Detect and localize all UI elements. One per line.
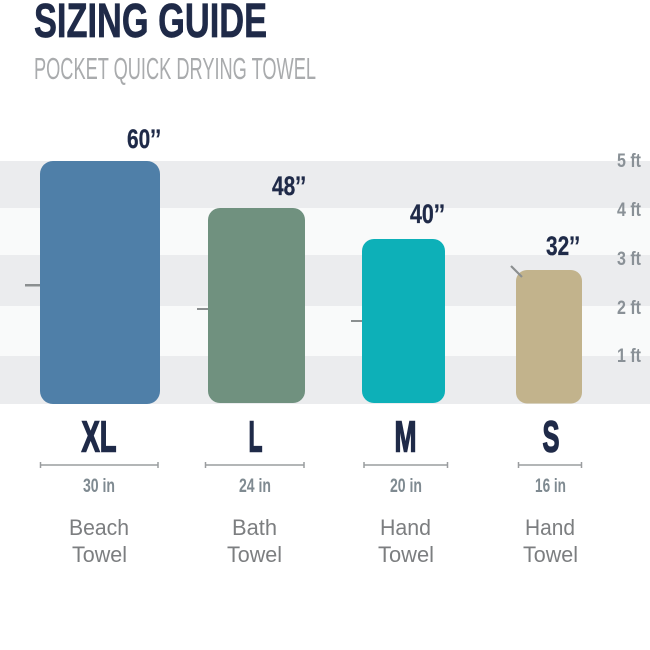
XL width ruler bbox=[40, 462, 158, 468]
column: M hand towel bbox=[351, 199, 448, 567]
L height label: 48’’ bbox=[272, 171, 306, 201]
M width ruler bbox=[364, 462, 448, 468]
XL hanging loop bbox=[25, 284, 41, 286]
S width label: 16 in bbox=[535, 476, 566, 497]
height scale labels: 2 ft bbox=[617, 298, 642, 319]
height scale labels: 5 ft bbox=[617, 151, 642, 172]
L towel name: Towel bbox=[227, 542, 282, 567]
M height label: 40’’ bbox=[410, 199, 445, 229]
XL towel name: Towel bbox=[72, 542, 127, 567]
XL towel name bbox=[69, 515, 129, 567]
S hanging loop bbox=[511, 266, 522, 277]
M towel name: Towel bbox=[378, 542, 434, 567]
height scale labels: 4 ft bbox=[617, 200, 642, 221]
M size letter: M bbox=[394, 412, 416, 462]
M towel name bbox=[378, 515, 434, 567]
L size letter: L bbox=[248, 412, 262, 462]
L width ruler bbox=[206, 462, 304, 468]
L towel name: Bath bbox=[232, 515, 277, 540]
S towel bbox=[516, 270, 582, 404]
S towel name: Towel bbox=[523, 542, 578, 567]
column: L bath towel bbox=[197, 171, 306, 567]
L width label: 24 in bbox=[239, 476, 271, 497]
column: XL beach towel bbox=[25, 124, 161, 567]
XL height label: 60’’ bbox=[127, 124, 161, 154]
S size letter: S bbox=[542, 412, 560, 462]
height scale labels: 1 ft bbox=[617, 346, 642, 367]
background height bands bbox=[0, 161, 650, 404]
M width label: 20 in bbox=[390, 476, 422, 497]
XL width label: 30 in bbox=[83, 476, 115, 497]
S towel name: Hand bbox=[525, 515, 575, 540]
subtitle: POCKET QUICK DRYING TOWEL bbox=[34, 51, 316, 86]
XL towel bbox=[40, 161, 160, 404]
L hanging loop bbox=[197, 308, 209, 310]
M towel name: Hand bbox=[380, 515, 431, 540]
M towel bbox=[362, 239, 445, 403]
M hanging loop bbox=[351, 320, 363, 322]
S height label: 32’’ bbox=[546, 231, 580, 261]
height scale labels: 3 ft bbox=[617, 249, 642, 270]
L towel name bbox=[227, 515, 282, 567]
column: S hand towel bbox=[511, 231, 582, 567]
XL towel name: Beach bbox=[69, 515, 129, 540]
XL size letter: XL bbox=[82, 412, 116, 462]
S width ruler bbox=[518, 462, 582, 468]
height scale labels bbox=[617, 151, 642, 367]
L towel bbox=[208, 208, 305, 403]
S towel name bbox=[523, 515, 578, 567]
